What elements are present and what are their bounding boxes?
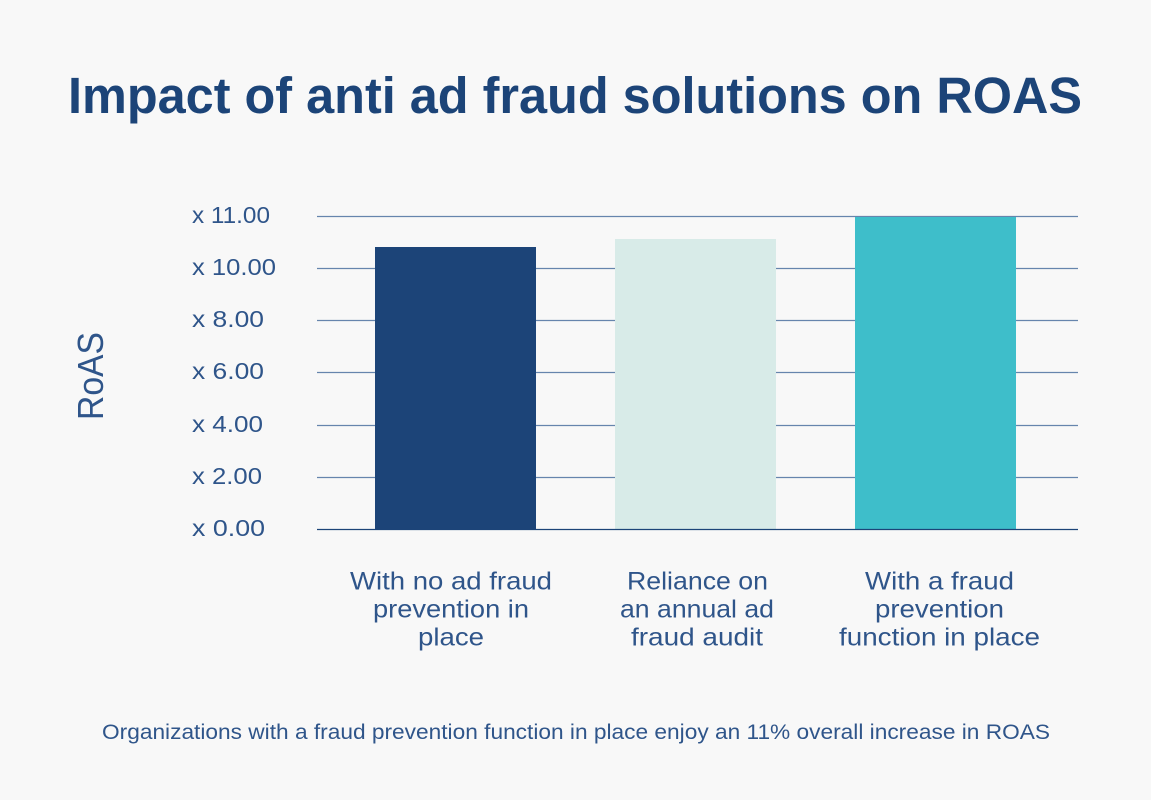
y-axis labels: x 2.00 — [192, 463, 262, 489]
bar: fraud prevention function — [855, 217, 1016, 530]
footnote: Organizations with a fraud prevention function in place enjoy an 11% overall increase in ROAS — [102, 721, 1050, 744]
y-axis labels: x 0.00 — [192, 515, 265, 541]
y-axis labels: x 10.00 — [192, 254, 276, 280]
category label: prevention function: function in place — [839, 624, 1040, 652]
category label: prevention function: prevention — [875, 596, 1004, 624]
y-axis labels: x 8.00 — [192, 306, 264, 332]
category label: prevention function: With a fraud — [865, 568, 1014, 596]
bar: no prevention — [375, 247, 536, 530]
title: Impact of anti ad fraud solutions on ROAS — [68, 67, 1082, 124]
category label: no prevention: place — [418, 624, 484, 652]
category label: no prevention — [350, 568, 552, 652]
y-axis labels — [192, 202, 276, 541]
category label: no prevention: With no ad fraud — [350, 568, 552, 596]
category label: annual audit: fraud audit — [631, 624, 763, 652]
bar: annual audit — [615, 239, 776, 530]
category label: annual audit: Reliance on — [627, 568, 768, 596]
y-axis labels: x 4.00 — [192, 411, 263, 437]
category label: annual audit — [620, 568, 774, 652]
category label: prevention function — [839, 568, 1040, 652]
y-axis labels: x 6.00 — [192, 358, 264, 384]
category label: no prevention: prevention in — [373, 596, 529, 624]
category label: annual audit: an annual ad — [620, 596, 774, 624]
x-axis baseline — [317, 528, 1078, 530]
y-axis labels: x 11.00 — [192, 202, 270, 228]
y-axis title: RoAS — [70, 332, 111, 420]
